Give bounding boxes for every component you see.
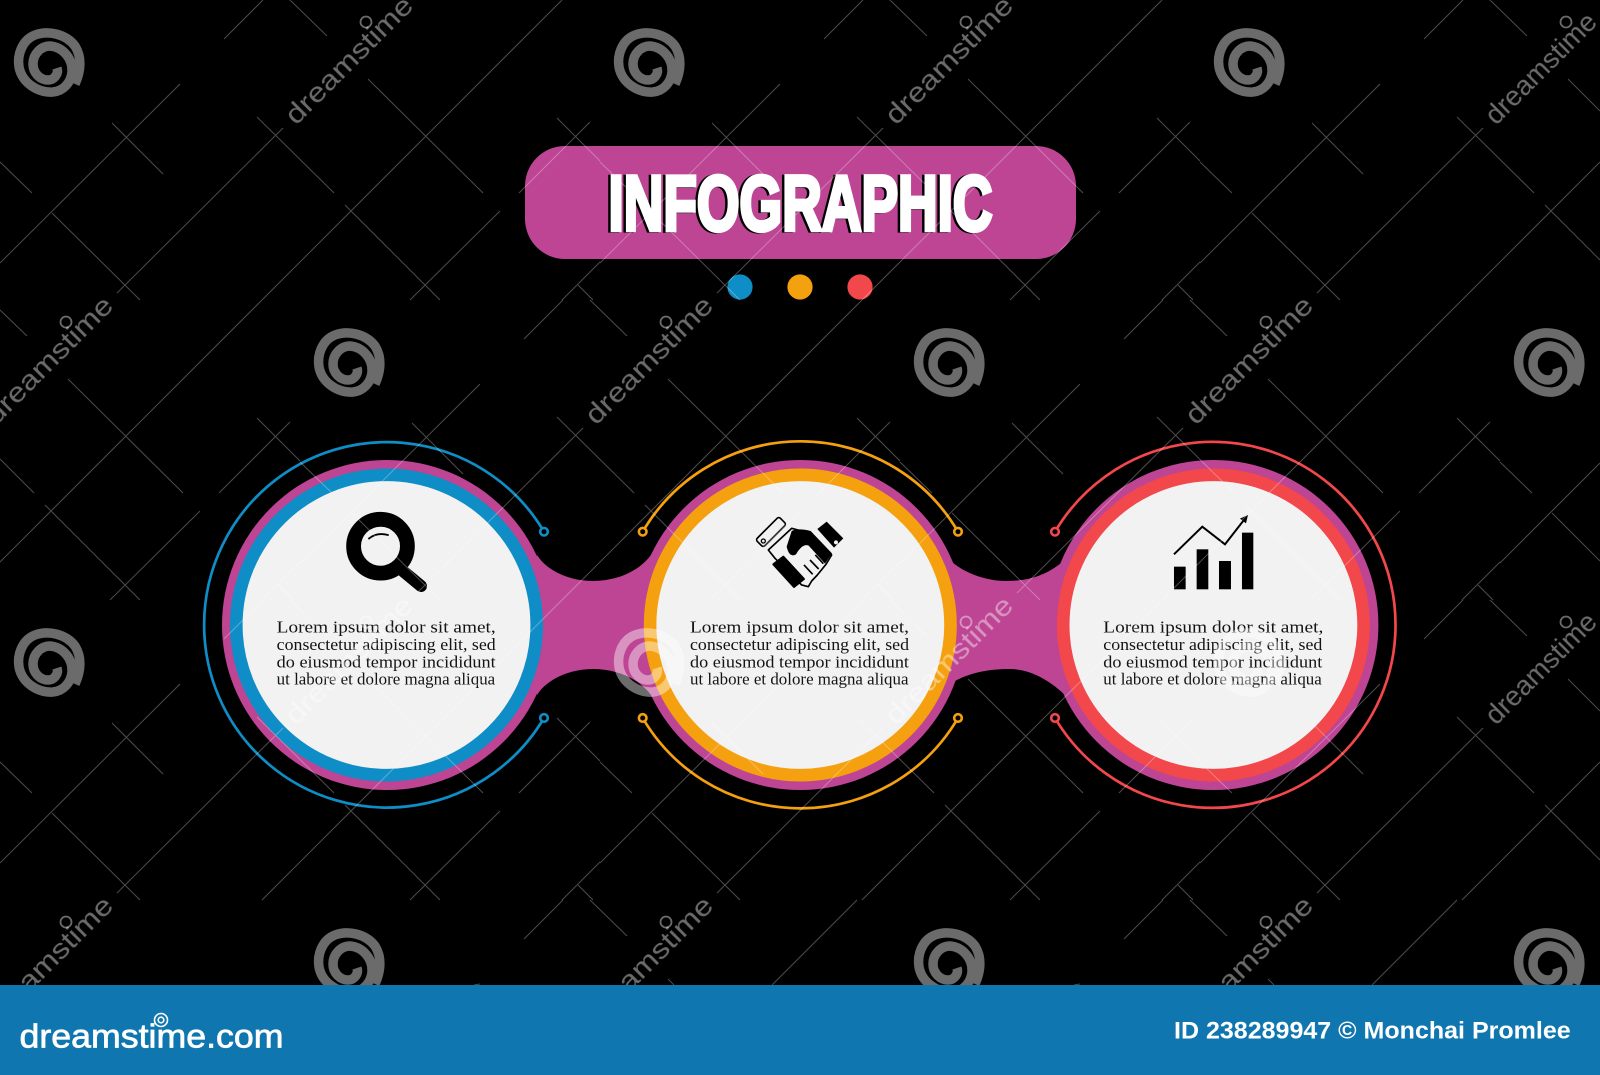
body text: do eiusmod tempor incididunt bbox=[277, 652, 496, 671]
body text: ut labore et dolore magna aliqua bbox=[277, 670, 496, 689]
watermark overlay: dreamstime bbox=[278, 0, 419, 130]
body text: consectetur adipiscing elit, sed bbox=[277, 635, 496, 654]
body text: Lorem ipsum dolor sit amet, bbox=[277, 618, 496, 637]
title shadow: INFOGRAPHIC bbox=[606, 160, 990, 248]
panel: step 1 search bbox=[204, 442, 548, 808]
arc end dots bbox=[1051, 528, 1059, 722]
title: INFOGRAPHIC bbox=[608, 159, 992, 247]
logo spiral mark bbox=[154, 1014, 168, 1026]
connected magenta body bbox=[222, 460, 1378, 790]
body text: ut labore et dolore magna aliqua bbox=[1103, 670, 1322, 689]
panel: step 2 partnership bbox=[639, 441, 962, 808]
orange top arc bbox=[643, 441, 958, 532]
body text: ut labore et dolore magna aliqua bbox=[690, 670, 909, 689]
red outer arc bbox=[1055, 442, 1396, 808]
red ring and white disc bbox=[1063, 475, 1364, 775]
footer logo: dreamstime.com bbox=[20, 1018, 284, 1054]
icon: bar chart with rising arrow bbox=[1174, 515, 1253, 589]
watermark overlay: dreamstime bbox=[1478, 6, 1600, 130]
body text bbox=[277, 618, 496, 689]
watermark overlay: dreamstime bbox=[1178, 290, 1319, 430]
top arc end dot bbox=[540, 528, 548, 536]
watermark overlay: dreamstime bbox=[878, 0, 1019, 130]
body text: consectetur adipiscing elit, sed bbox=[690, 635, 910, 654]
body text: do eiusmod tempor incididunt bbox=[1103, 652, 1323, 671]
title pill bbox=[525, 146, 1076, 259]
orange bottom arc bbox=[643, 718, 958, 808]
body text: Lorem ipsum dolor sit amet, bbox=[1103, 618, 1323, 637]
body text: do eiusmod tempor incididunt bbox=[690, 652, 909, 671]
watermark overlay: dreamstime bbox=[1178, 890, 1319, 1030]
watermark overlay: dreamstime bbox=[1478, 606, 1600, 730]
arc end dots bbox=[639, 528, 962, 722]
icon: handshake bbox=[756, 517, 843, 587]
watermark overlay: dreamstime bbox=[578, 890, 719, 1030]
three colour dots bbox=[727, 274, 873, 300]
body text bbox=[690, 618, 910, 689]
image credit: ID 238289947 © Monchai Promlee bbox=[1174, 1017, 1571, 1044]
body text: Lorem ipsum dolor sit amet, bbox=[690, 618, 909, 637]
body text: consectetur adipiscing elit, sed bbox=[1103, 635, 1323, 654]
watermark overlay: dreamstime bbox=[578, 290, 719, 430]
panel: step 3 growth bbox=[1051, 442, 1396, 808]
orange ring and white disc bbox=[650, 475, 950, 775]
icon: magnifying glass bbox=[354, 519, 421, 586]
bottom arc end dot bbox=[540, 714, 548, 722]
footer bar bbox=[0, 985, 1600, 1075]
blue ring and white disc bbox=[236, 475, 537, 775]
body text bbox=[1103, 618, 1323, 689]
title banner bbox=[525, 146, 1076, 259]
watermark overlay: dreamstime bbox=[278, 590, 419, 730]
blue outer arc bbox=[204, 442, 544, 808]
watermark overlay: dreamstime bbox=[878, 590, 1019, 730]
